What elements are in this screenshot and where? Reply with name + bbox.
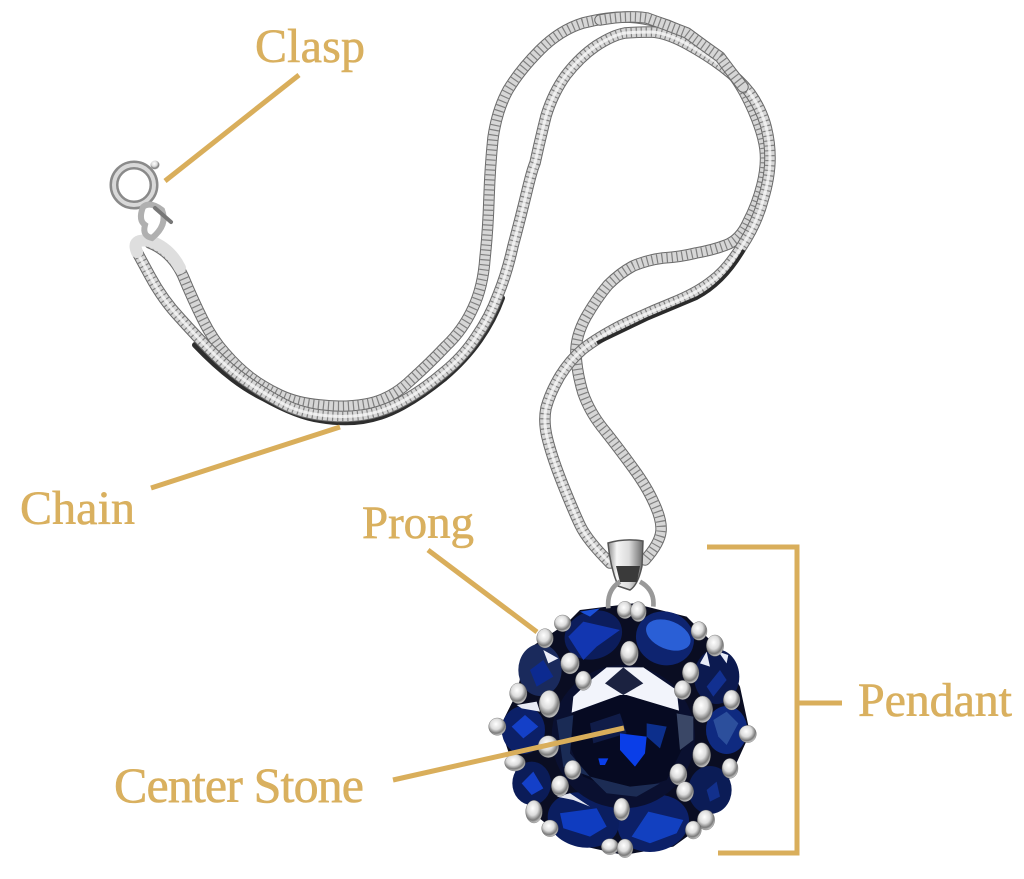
bail [608, 540, 643, 590]
pendant [489, 582, 756, 859]
side stones [502, 602, 747, 859]
leader line: center stone [393, 728, 624, 780]
bracket: pendant [707, 547, 842, 853]
leader line: chain [151, 427, 340, 488]
label: Chain: Chain [20, 482, 135, 535]
center stone [552, 665, 695, 808]
label: Center Stone: Center Stone [114, 757, 364, 813]
leader line: prong [428, 550, 537, 632]
pendant base [500, 603, 750, 855]
leader line: clasp [165, 75, 299, 181]
necklace chain [136, 17, 770, 563]
label: Pendant: Pendant [858, 674, 1013, 727]
prongs [489, 601, 756, 858]
label: Prong: Prong [362, 497, 474, 549]
clasp [114, 160, 171, 238]
label: Clasp: Clasp [255, 20, 365, 73]
bail ring [608, 582, 653, 608]
